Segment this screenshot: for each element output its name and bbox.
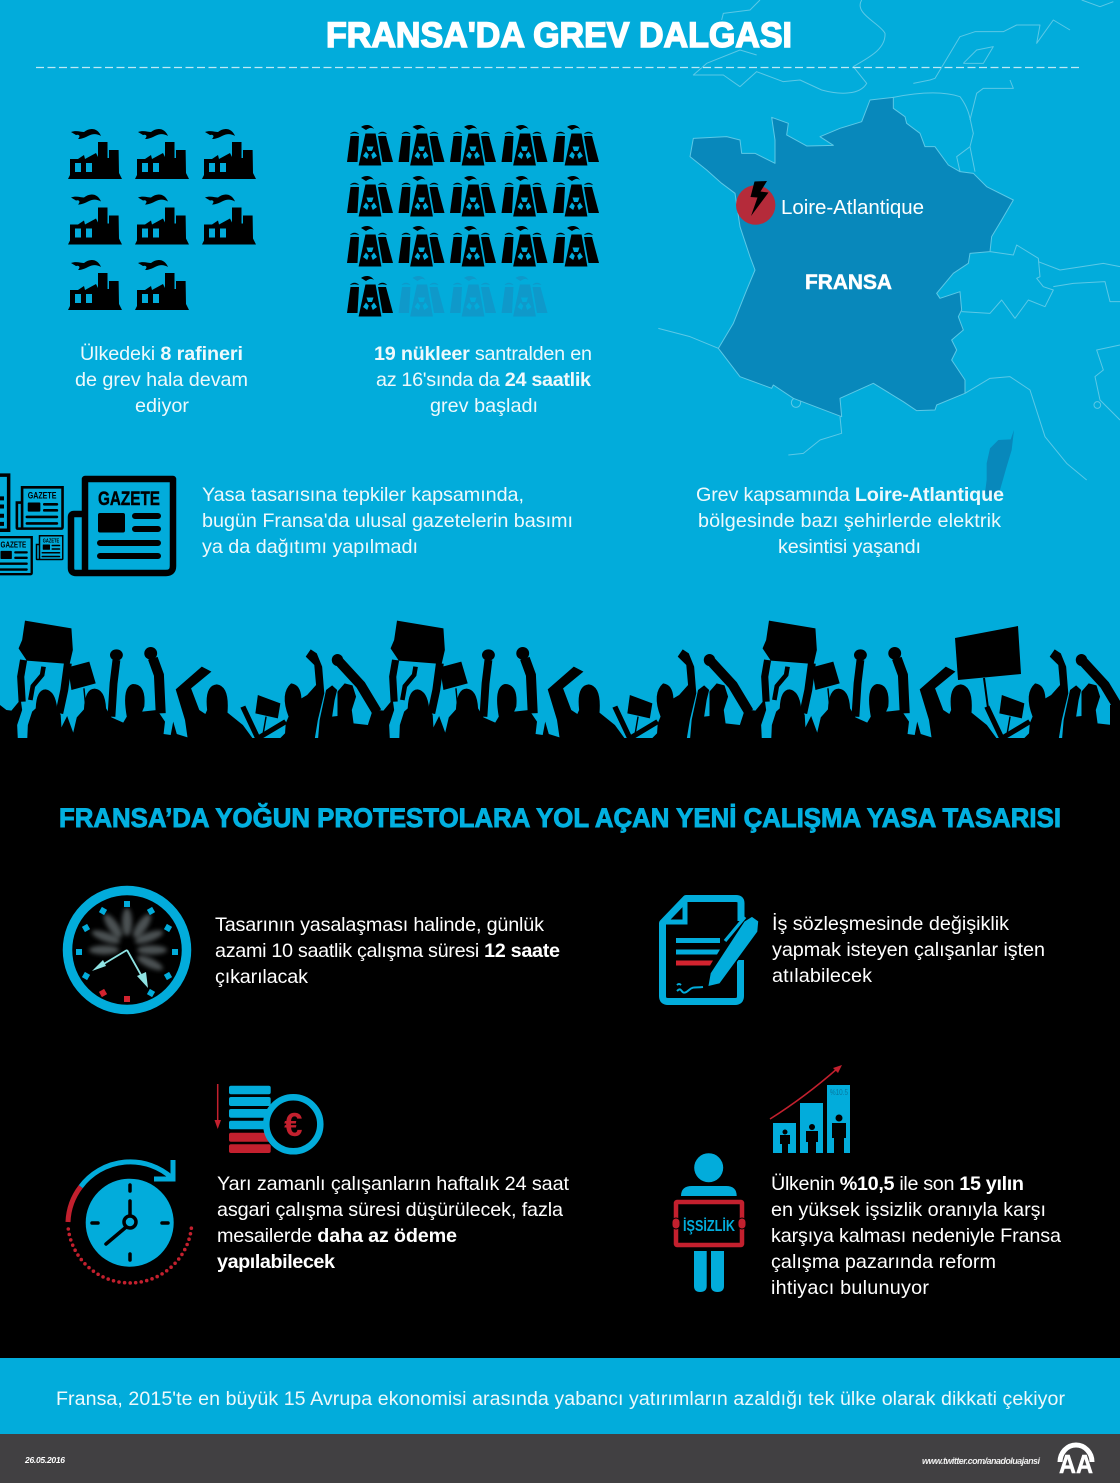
text: part-time work: Yarı zamanlı çalışanların haftalık 24 saat	[217, 1173, 570, 1195]
small newspaper 1	[17, 487, 63, 529]
bottom blue band	[0, 1358, 1120, 1434]
text: part-time work: yapılabilecek	[217, 1251, 336, 1273]
title: FRANSA'DA GREV DALGASI	[326, 16, 792, 55]
text: refineries: de grev hala devam	[75, 369, 248, 391]
icon: rising unemployment bars	[770, 1065, 850, 1153]
dashed divider	[36, 66, 1081, 68]
text: unemployment: en yüksek işsizlik oranıyla karşı	[771, 1199, 1046, 1221]
text: power cut: kesintisi yaşandı	[778, 536, 921, 558]
small newspaper 2	[0, 537, 32, 574]
icon: person holding unemployment sign: İŞSİZLİK	[683, 1217, 735, 1235]
bottom blue band: Fransa, 2015'te en büyük 15 Avrupa ekonomisi arasında yabancı yatırımların azaldığı tek ülke olarak dikkati çekiyor	[56, 1388, 1065, 1410]
text: nuclear plants	[374, 343, 592, 417]
text: nuclear plants: grev başladı	[430, 395, 538, 417]
text: working hours: azami 10 saatlik çalışma süresi 12 saate	[215, 940, 560, 962]
heading: labour bill: FRANSA’DA YOĞUN PROTESTOLARA YOL AÇAN YENİ ÇALIŞMA YASA TASARISI	[59, 802, 1061, 833]
icon: newspapers	[0, 475, 173, 574]
map label: Fransa: FRANSA	[805, 271, 892, 294]
text: unemployment: Ülkenin %10,5 ile son 15 yılın	[771, 1173, 1024, 1195]
footer bar: 26.05.2016	[24, 1455, 65, 1465]
icon: rising unemployment bars: %10.5	[830, 1088, 848, 1097]
icons: eight refineries	[68, 129, 256, 310]
text: contract	[772, 912, 1045, 987]
text: newspapers: Yasa tasarısına tepkiler kapsamında,	[202, 484, 524, 506]
text: nuclear plants: 19 nükleer santralden en	[374, 343, 592, 365]
text: nuclear plants: az 16'sında da 24 saatlik	[376, 369, 592, 391]
text: part-time work: asgari çalışma süresi düşürülecek, fazla	[217, 1199, 563, 1221]
map marker: Loire-Atlantique	[736, 181, 924, 225]
text: unemployment: karşıya kalması nedeniyle Fransa	[771, 1225, 1061, 1247]
icon: contract and pen	[662, 898, 759, 1002]
text: unemployment: ihtiyacı bulunuyor	[771, 1277, 929, 1299]
small newspaper 1: GAZETE	[28, 491, 56, 501]
footer bar: www.twitter.com/anadoluajansi	[922, 1456, 1040, 1466]
text: newspapers	[202, 484, 573, 558]
text: power cut: bölgesinde bazı şehirlerde elektrik	[698, 510, 1001, 532]
text: refineries: ediyor	[135, 395, 189, 417]
logo: AA: AA	[1059, 1449, 1093, 1479]
map marker: Loire-Atlantique: Loire-Atlantique	[781, 196, 924, 219]
map of France and neighbouring countries	[658, 0, 1120, 500]
small newspaper cut by left edge	[0, 475, 9, 530]
text: power cut	[696, 484, 1004, 558]
icon: person holding unemployment sign	[672, 1153, 746, 1292]
text: unemployment	[771, 1173, 1061, 1299]
small newspaper 2: GAZETE	[1, 540, 27, 549]
black lower area	[0, 738, 1120, 1361]
text: contract: atılabilecek	[772, 965, 872, 987]
crowd silhouette	[0, 621, 1120, 750]
icon: clock with blurred hands	[68, 890, 186, 1010]
text: working hours: Tasarının yasalaşması halinde, günlük	[215, 914, 544, 936]
text: contract: yapmak isteyen çalışanlar işten	[772, 939, 1045, 961]
icons: nineteen nuclear plants	[347, 125, 599, 317]
icon: coins and euro: €	[284, 1106, 302, 1143]
large newspaper: GAZETE	[98, 489, 160, 510]
text: part-time work	[217, 1173, 570, 1273]
icon: coins and euro	[214, 1084, 320, 1153]
text: power cut: Grev kapsamında Loire-Atlantique	[696, 484, 1004, 506]
text: refineries	[75, 343, 248, 417]
text: unemployment: çalışma pazarında reform	[771, 1251, 996, 1273]
text: newspapers: bugün Fransa'da ulusal gazetelerin basımı	[202, 510, 573, 532]
text: refineries: Ülkedeki 8 rafineri	[80, 343, 243, 365]
icon: clock with overtime arrow	[68, 1160, 192, 1283]
text: part-time work: mesailerde daha az ödeme	[217, 1225, 457, 1247]
text: working hours: çıkarılacak	[215, 966, 308, 988]
small newspaper 3: GAZETE	[43, 538, 60, 544]
background: blue upper area	[0, 0, 1120, 745]
text: newspapers: ya da dağıtımı yapılmadı	[202, 536, 418, 558]
text: working hours	[215, 914, 560, 988]
footer bar	[0, 1434, 1120, 1483]
small newspaper 3	[36, 536, 63, 560]
large newspaper	[71, 479, 173, 573]
text: contract: İş sözleşmesinde değişiklik	[772, 912, 1009, 935]
